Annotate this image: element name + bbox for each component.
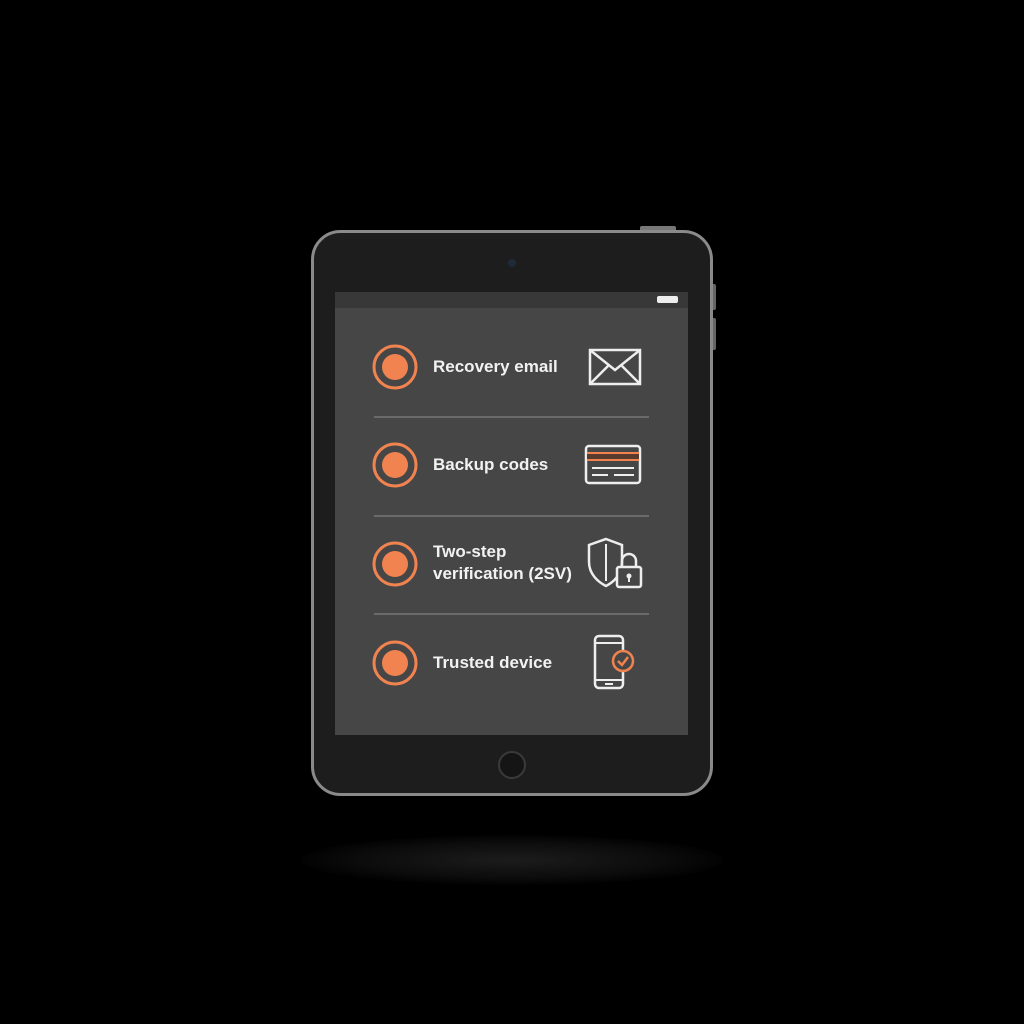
label	[433, 542, 572, 583]
shadow under tablet	[300, 835, 724, 885]
item: Two-step verification	[372, 538, 642, 588]
icon: phone check	[594, 634, 634, 690]
side buttons	[640, 226, 676, 234]
label: verification (2SV)	[433, 564, 572, 583]
icon: orange radio	[372, 542, 418, 586]
label: Recovery email	[433, 357, 558, 376]
item: Trusted device	[372, 634, 634, 690]
item: Backup codes	[372, 442, 642, 488]
icon: orange radio	[372, 442, 418, 488]
icon: orange radio	[372, 344, 418, 390]
icon: envelope	[588, 348, 642, 386]
label: Backup codes	[433, 455, 548, 474]
item: Recovery email	[372, 344, 642, 390]
label: Trusted device	[433, 653, 552, 672]
icon: card	[584, 444, 642, 484]
label: Two-step	[433, 542, 506, 561]
icon: shield lock	[588, 538, 642, 588]
icon: orange radio	[372, 640, 418, 686]
